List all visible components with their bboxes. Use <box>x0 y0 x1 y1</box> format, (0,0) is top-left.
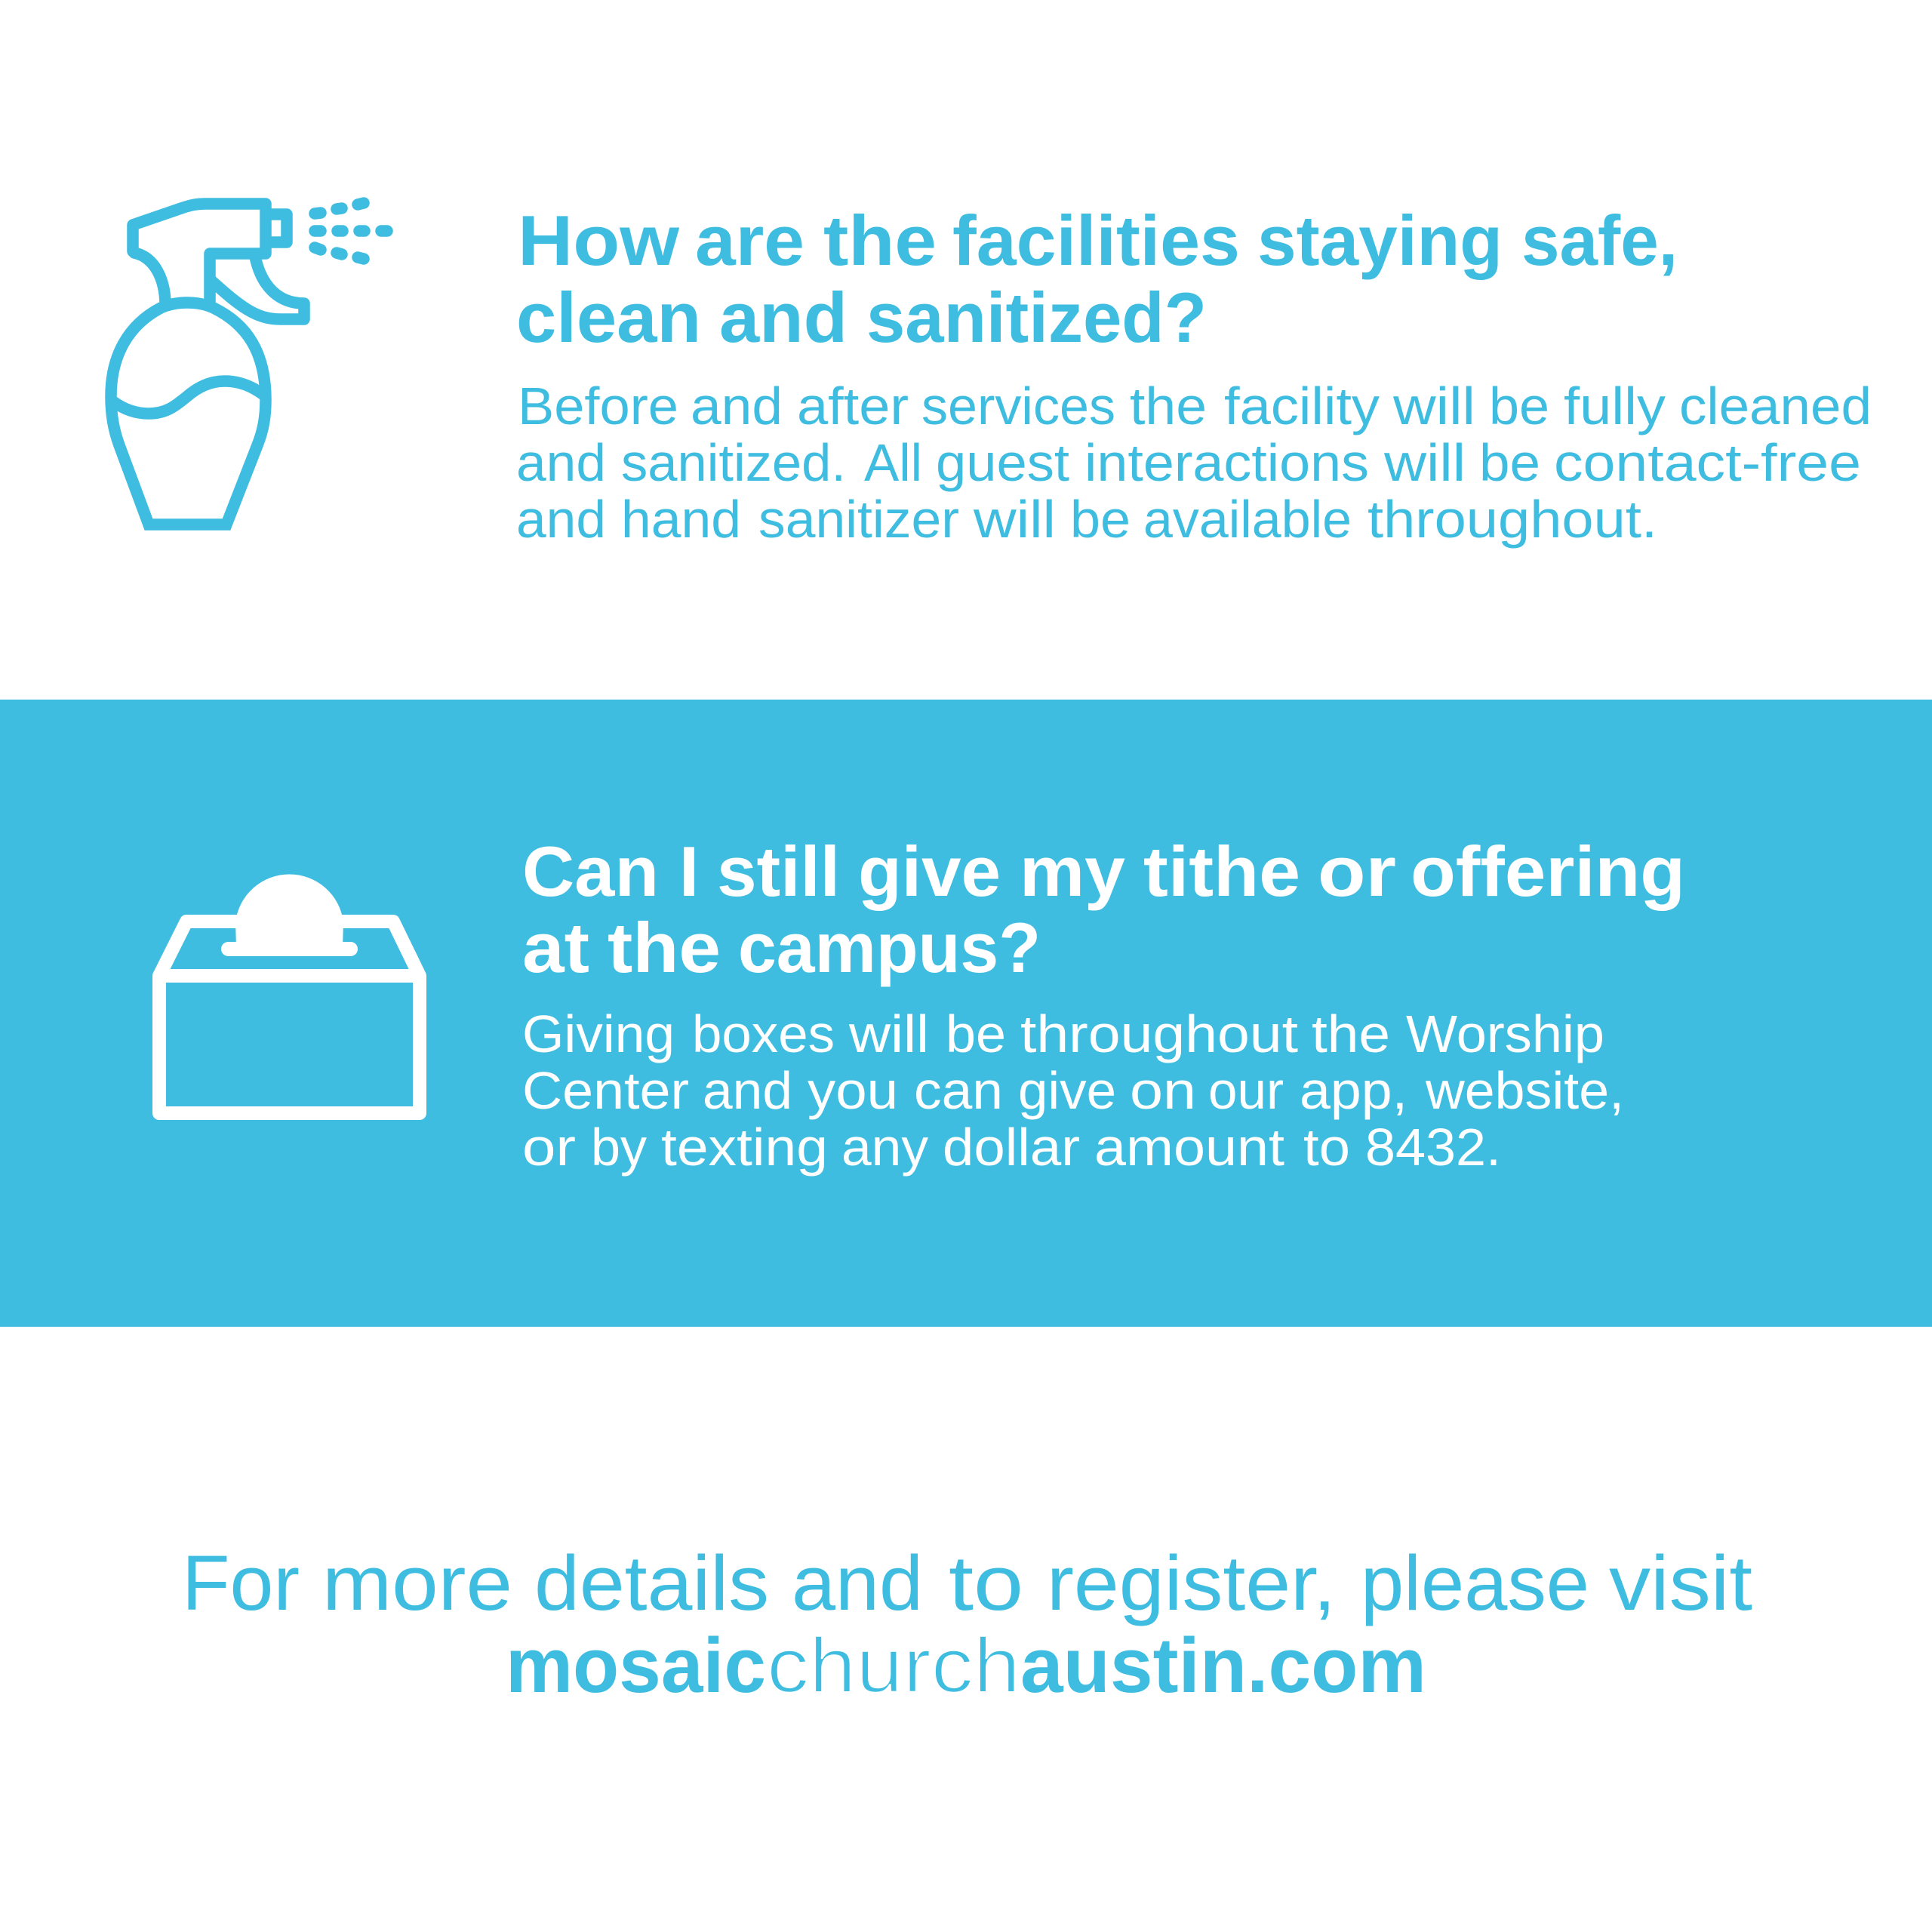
text: facilities answer: will <box>1392 377 1475 435</box>
text: facilities answer: contact-free <box>1554 433 1861 492</box>
text: giving answer: can <box>914 1061 1003 1120</box>
heading: facilities: the <box>823 201 937 280</box>
heading: facilities: are <box>695 201 804 280</box>
text: facilities answer: facility <box>1224 377 1380 435</box>
text: giving answer: the <box>1312 1004 1390 1063</box>
text: register prompt: visit <box>1609 1540 1752 1626</box>
text: facilities answer: the <box>1130 377 1207 435</box>
text: facilities answer: sanitized. <box>621 433 846 492</box>
text: giving answer: texting <box>661 1118 828 1177</box>
text: facilities answer: be <box>1070 490 1131 549</box>
text: facilities answer: will <box>1383 433 1466 492</box>
heading: giving: my <box>1020 832 1125 911</box>
heading: giving: I <box>679 832 699 911</box>
text: giving answer: throughout <box>1020 1004 1298 1063</box>
text: facilities answer: will <box>973 490 1056 549</box>
heading: facilities: sanitized? <box>866 278 1207 357</box>
text: giving answer: website, <box>1425 1061 1624 1120</box>
text: website address: church <box>767 1622 1020 1709</box>
heading: facilities: and <box>719 278 848 357</box>
heading: facilities <box>516 201 1678 357</box>
panel: facilities question <box>111 201 1872 549</box>
heading: facilities: clean <box>516 278 701 357</box>
text: facilities answer: sanitizer <box>758 490 959 549</box>
text: register prompt: please <box>1361 1540 1589 1626</box>
text: giving answer: you <box>808 1061 898 1120</box>
heading: facilities: staying <box>1257 201 1503 280</box>
text: facilities answer: services <box>921 377 1115 435</box>
text: facilities answer: and <box>516 433 606 492</box>
text: facilities answer: guest <box>936 433 1069 492</box>
text: facilities answer: throughout. <box>1367 490 1657 549</box>
heading: giving: campus? <box>738 908 1041 987</box>
panel: giving band <box>0 700 1932 1327</box>
text: facilities answer: and <box>691 377 783 435</box>
text: giving answer: will <box>848 1004 929 1063</box>
text: website address: austin.com <box>1020 1622 1426 1709</box>
text: facilities answer: hand <box>621 490 741 549</box>
text: website address <box>506 1622 1426 1709</box>
heading: giving: at <box>522 908 589 987</box>
text: facilities answer: after <box>797 377 909 435</box>
text: giving answer: any <box>841 1118 928 1177</box>
text: facilities answer: Before <box>518 377 678 435</box>
heading: giving <box>522 832 1685 987</box>
text: giving answer <box>522 1004 1624 1177</box>
text: giving answer: amount <box>1094 1118 1284 1177</box>
text: giving answer: Worship <box>1406 1004 1604 1063</box>
text: facilities answer: All <box>864 433 922 492</box>
panel: footer call to action <box>182 1540 1752 1709</box>
text: giving answer: app, <box>1300 1061 1407 1120</box>
text: giving answer: on <box>1130 1061 1196 1120</box>
heading: facilities: safe, <box>1521 201 1678 280</box>
text: giving answer: by <box>591 1118 647 1177</box>
text: register prompt: and <box>792 1540 923 1626</box>
text: website address: mosaic <box>506 1622 766 1709</box>
text: giving answer: or <box>522 1118 576 1177</box>
heading: giving: tithe <box>1143 832 1300 911</box>
text: giving answer: boxes <box>692 1004 835 1063</box>
heading: giving: offering <box>1411 832 1685 911</box>
text: giving answer: dollar <box>943 1118 1080 1177</box>
text: register prompt: register, <box>1047 1540 1336 1626</box>
icon: spray bottle <box>111 203 387 525</box>
text: giving answer: be <box>946 1004 1006 1063</box>
text: giving answer: 8432. <box>1365 1118 1501 1177</box>
icon: giving box <box>159 874 420 1113</box>
text: register prompt: more <box>322 1540 512 1626</box>
text: facilities answer: interactions <box>1084 433 1369 492</box>
heading: facilities: How <box>518 201 680 280</box>
text: giving answer: Center <box>522 1061 689 1120</box>
text: facilities answer: fully <box>1564 377 1666 435</box>
text: facilities answer <box>516 377 1872 549</box>
heading: facilities: facilities <box>952 201 1240 280</box>
heading: giving: give <box>858 832 1001 911</box>
text: facilities answer: cleaned <box>1679 377 1872 435</box>
text: facilities answer: and <box>516 490 606 549</box>
text: giving answer: and <box>703 1061 792 1120</box>
heading: giving: or <box>1318 832 1396 911</box>
text: giving answer: our <box>1208 1061 1284 1120</box>
text: giving answer: Giving <box>522 1004 675 1063</box>
text: facilities answer: available <box>1143 490 1352 549</box>
heading: giving: Can <box>522 832 659 911</box>
text: giving answer: give <box>1018 1061 1116 1120</box>
text: facilities answer: be <box>1489 377 1549 435</box>
heading: giving: the <box>608 908 721 987</box>
heading: giving: still <box>717 832 840 911</box>
text: giving answer: to <box>1303 1118 1350 1177</box>
text: register prompt: details <box>534 1540 769 1626</box>
text: facilities answer: be <box>1479 433 1540 492</box>
text: register prompt: to <box>949 1540 1023 1626</box>
band background <box>0 700 1932 1327</box>
text: register prompt: For <box>182 1540 300 1626</box>
